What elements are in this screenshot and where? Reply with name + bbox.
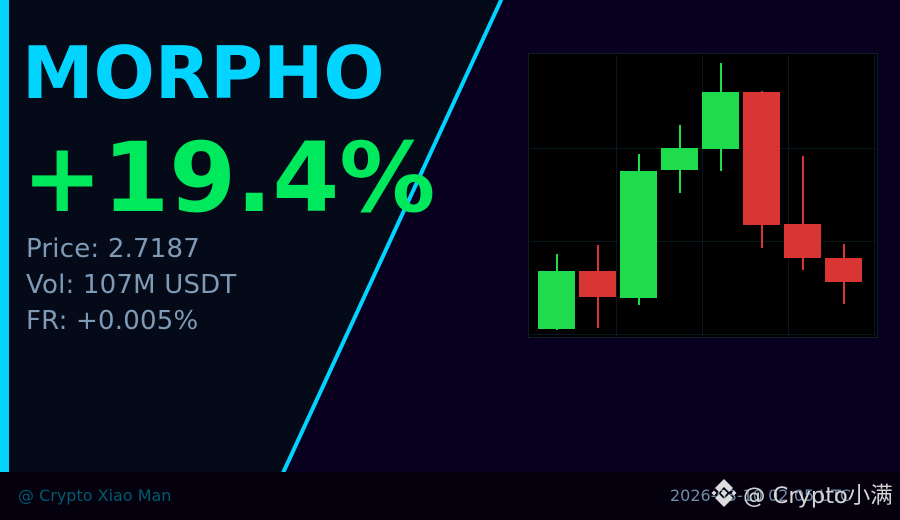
funding rate: FR: +0.005% xyxy=(26,306,198,336)
diagonal accent line xyxy=(283,0,502,473)
footer timestamp: 2026-03-10 02:05 UTC xyxy=(670,486,851,505)
candle 7 xyxy=(784,156,821,270)
candlestick chart xyxy=(528,54,878,338)
left accent bar xyxy=(0,0,9,472)
candle 3 xyxy=(620,154,657,305)
panel: left diagonal xyxy=(0,0,501,472)
icon: diamond logo xyxy=(712,479,736,507)
price: Price: 2.7187 xyxy=(26,234,200,264)
price stats xyxy=(26,234,236,336)
footer bar xyxy=(0,472,900,520)
watermark: @ Crypto小满 xyxy=(743,483,893,509)
candle 2 xyxy=(579,245,616,328)
volume: Vol: 107M USDT xyxy=(26,270,236,300)
footer handle: @ Crypto Xiao Man xyxy=(18,486,171,505)
change percentage: +19.4% xyxy=(22,122,435,234)
title: ticker: MORPHO xyxy=(22,31,385,115)
candle 5 xyxy=(702,63,739,171)
candle 1 xyxy=(538,254,575,330)
candle 6 xyxy=(743,91,780,248)
candle 4 xyxy=(661,125,698,193)
candle 8 xyxy=(825,244,862,304)
